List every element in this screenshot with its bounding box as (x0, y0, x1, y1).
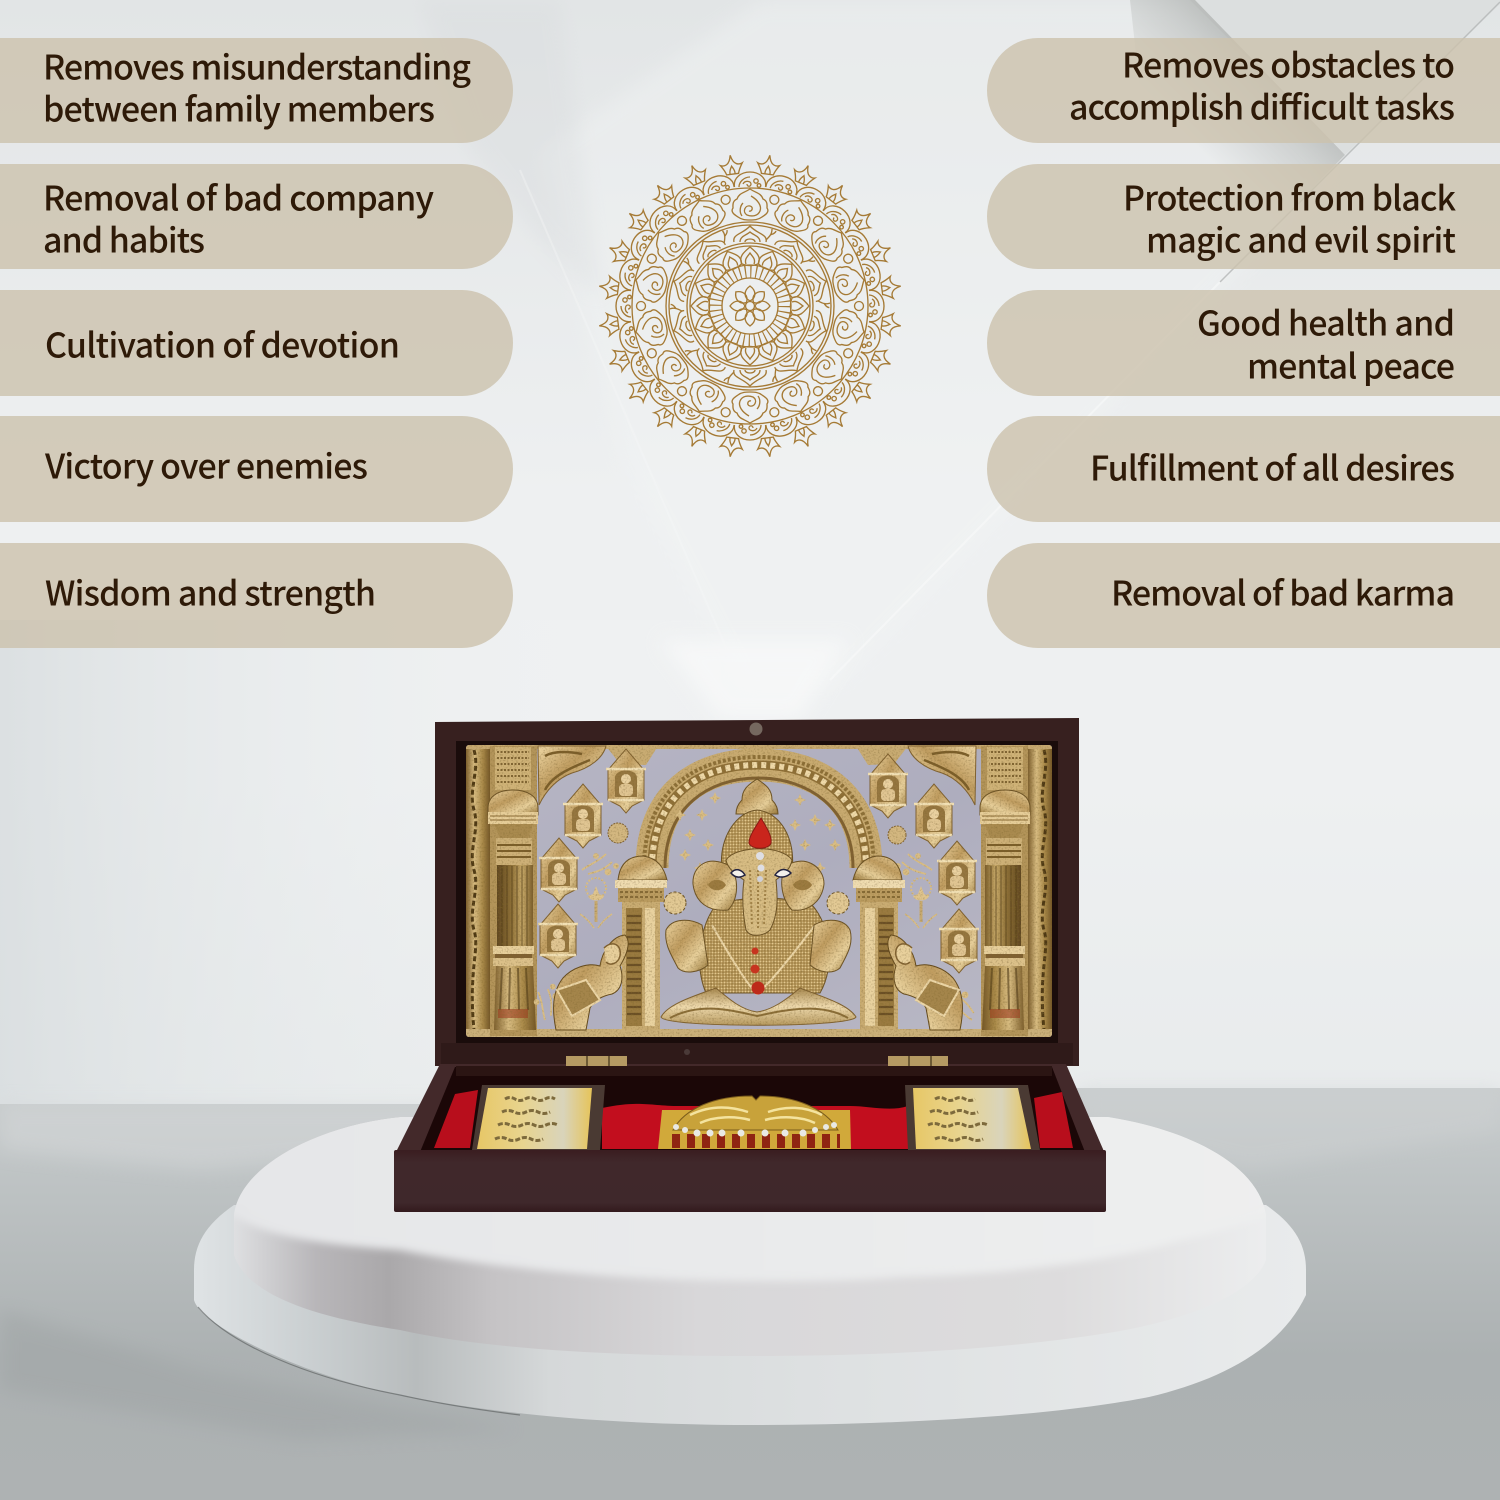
golden feet (charan paduka) (658, 1096, 851, 1149)
pill: bad company: Removal of bad company (43, 172, 434, 220)
pill: enemies: Victory over enemies (44, 440, 368, 488)
pill: obstacles: accomplish difficult tasks (1069, 80, 1455, 130)
pill: desires (987, 416, 1500, 522)
pill: devotion (0, 290, 513, 396)
box hinges (566, 1056, 948, 1066)
pill: misunderstanding (0, 38, 513, 143)
pill: wisdom: Wisdom and strength (45, 566, 376, 616)
gold relief (466, 745, 1052, 1037)
pill: karma (987, 543, 1500, 648)
arch (644, 757, 874, 868)
pill: obstacles: Removes obstacles to (1122, 38, 1455, 88)
embossed Ganesha plaque (466, 745, 1052, 1037)
icon: gold mandala (598, 154, 902, 458)
lower disc (194, 1205, 1306, 1425)
pill: black magic: magic and evil spirit (1146, 214, 1456, 262)
pill: desires: Fulfillment of all desires (1090, 442, 1455, 490)
pill: black magic: Protection from black (1123, 172, 1456, 220)
box tray (394, 1056, 1106, 1212)
upper disc (234, 1117, 1264, 1355)
right benefit pills (987, 38, 1500, 648)
pill: black magic (987, 164, 1500, 269)
pill: obstacles (987, 38, 1500, 143)
floor (0, 1088, 1500, 1500)
background wall (0, 0, 1500, 1110)
pill: misunderstanding: between family members (43, 82, 435, 132)
box lid (435, 718, 1079, 1066)
left mantra card (472, 1085, 605, 1150)
Ganesha figure (661, 779, 856, 1025)
left benefit pills (0, 38, 513, 648)
pill: health (987, 290, 1500, 396)
pill: bad company: and habits (43, 214, 205, 262)
red felt (434, 1090, 1073, 1149)
pill: bad company (0, 164, 513, 269)
podium (194, 1117, 1306, 1425)
ruby gems (749, 818, 771, 994)
pill: karma: Removal of bad karma (1111, 566, 1455, 616)
pill: devotion: Cultivation of devotion (45, 318, 400, 368)
pill: enemies (0, 416, 513, 522)
pill: misunderstanding: Removes misunderstanding (43, 40, 471, 90)
box front panel (394, 1150, 1106, 1212)
open wooden pocket temple box (394, 718, 1106, 1212)
right mantra card (905, 1085, 1040, 1150)
pill: health: Good health and (1197, 296, 1455, 346)
pill: health: mental peace (1247, 340, 1455, 388)
eyes (731, 869, 791, 877)
pill: wisdom (0, 543, 513, 648)
